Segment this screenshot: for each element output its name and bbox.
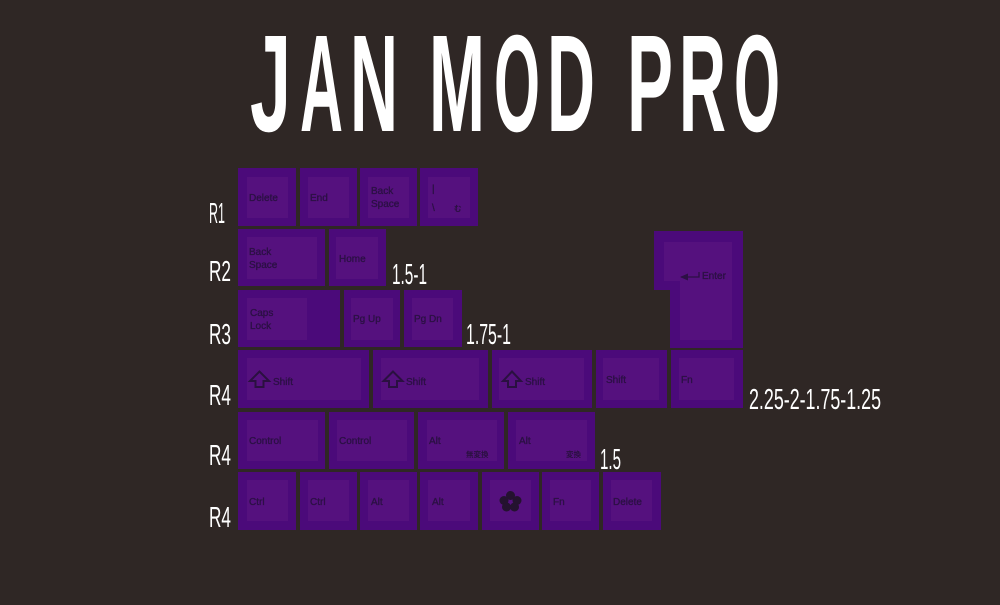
enter key [654, 231, 743, 348]
row 4 shift keys [238, 350, 743, 408]
row 1 keys: End [310, 193, 328, 204]
row 1 keys: Space [371, 199, 400, 210]
row labels: R1 [209, 198, 225, 230]
row labels: R4 [209, 380, 231, 412]
title: M [429, 7, 485, 161]
size labels: 2.25-2-1.75-1.25 [749, 384, 881, 416]
title: R [679, 7, 726, 161]
row 1 keys: Back [371, 186, 394, 197]
size labels: 1.5 [600, 444, 621, 476]
row 3 keys [238, 290, 462, 347]
row 5 keys: Control [249, 436, 281, 447]
row 3 keys: Lock [250, 321, 272, 332]
title: D [547, 7, 595, 161]
row 5 keys: Alt [519, 436, 531, 447]
row 2 keys: Space [249, 260, 278, 271]
row 4 shift keys: Shift [525, 377, 545, 388]
title: J [250, 7, 291, 161]
row 6 keys: Alt [371, 497, 383, 508]
row 4 shift keys: Shift [273, 377, 293, 388]
row 6 keys: Alt [432, 497, 444, 508]
row 4 shift keys: Shift [406, 377, 426, 388]
row 1 keys: Delete [249, 193, 278, 204]
title: O [494, 7, 540, 161]
row labels: R4 [209, 502, 231, 534]
enter key: Enter [702, 271, 727, 282]
row 2 keys: Back [249, 247, 272, 258]
row labels: R4 [209, 440, 231, 472]
row 5 keys: 無変換 [466, 449, 489, 459]
row 4 shift keys: Shift [606, 375, 626, 386]
row labels [209, 198, 231, 534]
size labels: 1.5-1 [392, 259, 427, 291]
row 6 keys: Fn [553, 497, 565, 508]
row 5 keys: 変換 [566, 449, 581, 459]
title: N [350, 7, 398, 161]
row 1 keys [238, 168, 478, 226]
title: P [627, 7, 673, 161]
row 1 keys: | [432, 184, 435, 195]
size labels: 1.75-1 [466, 319, 511, 351]
row 2 keys: Home [339, 254, 366, 265]
row 5 keys [238, 412, 595, 469]
size labels [392, 259, 881, 476]
row 6 keys: Ctrl [310, 497, 326, 508]
row 6 keys: Delete [613, 497, 642, 508]
row 6 keys [238, 472, 661, 530]
row 6 keys: Ctrl [249, 497, 265, 508]
text: O [734, 7, 780, 161]
row labels: R3 [209, 319, 231, 351]
row 1 keys: \ [432, 203, 435, 214]
icon: flower [500, 491, 522, 512]
row 2 keys [238, 229, 386, 286]
row 3 keys: Pg Dn [414, 314, 442, 325]
title [250, 7, 780, 161]
row 4 shift keys: Fn [681, 375, 693, 386]
row 1 keys: む [454, 204, 462, 213]
row 5 keys: Alt [429, 436, 441, 447]
title: A [300, 7, 343, 161]
row 3 keys: Pg Up [353, 314, 381, 325]
row labels: R2 [209, 256, 231, 288]
row 3 keys: Caps [250, 308, 273, 319]
row 5 keys: Control [339, 436, 371, 447]
